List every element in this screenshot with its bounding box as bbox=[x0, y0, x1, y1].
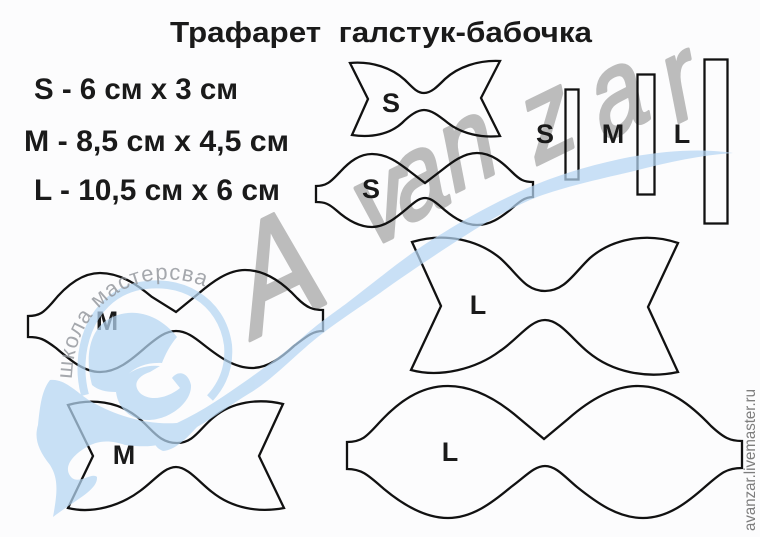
bow outline: medium long strip M bbox=[28, 270, 323, 372]
size list bbox=[24, 73, 289, 207]
bow outline: medium long strip M: M bbox=[96, 306, 118, 336]
strip L bbox=[674, 60, 728, 224]
bow outline: small bow S: S bbox=[382, 88, 400, 118]
watermark: school name on arc: школа мастерсва bbox=[60, 268, 206, 378]
bow outline: medium bow M bbox=[68, 401, 284, 510]
swirl bbox=[116, 366, 191, 420]
inner disc bbox=[89, 313, 177, 392]
bow outline: small long strip S: S bbox=[362, 174, 380, 204]
strip S: S bbox=[536, 119, 554, 149]
bow outline: large bow L: L bbox=[470, 290, 486, 320]
bow outline: large long strip L: L bbox=[442, 437, 458, 467]
strip M: M bbox=[602, 119, 624, 149]
watermark: gray signature: vanzar bbox=[344, 0, 707, 298]
size S: S - 6 см х 3 см bbox=[34, 73, 238, 106]
bow outline: small bow S bbox=[350, 61, 500, 136]
strip M bbox=[602, 74, 654, 194]
strip L: L bbox=[674, 119, 690, 149]
watermark: gray signature: A bbox=[223, 166, 333, 374]
size L: L - 10,5 см х 6 см bbox=[34, 174, 280, 207]
bow outline: large long strip L bbox=[347, 386, 742, 518]
bow outline: large bow L bbox=[411, 238, 678, 375]
outer ring bbox=[81, 284, 228, 398]
swoosh band bbox=[155, 150, 733, 451]
watermark: blue swoosh logo bbox=[36, 150, 733, 517]
bow outline: medium bow M: M bbox=[113, 440, 135, 470]
tail body bbox=[36, 380, 177, 517]
size M: M - 8,5 см х 4,5 см bbox=[24, 125, 289, 158]
site address: avanzar.livemaster.ru bbox=[742, 389, 759, 531]
title: Трафарет галстук-бабочка bbox=[170, 17, 593, 49]
bow outline: small long strip S bbox=[316, 153, 533, 227]
strip S bbox=[536, 90, 578, 180]
